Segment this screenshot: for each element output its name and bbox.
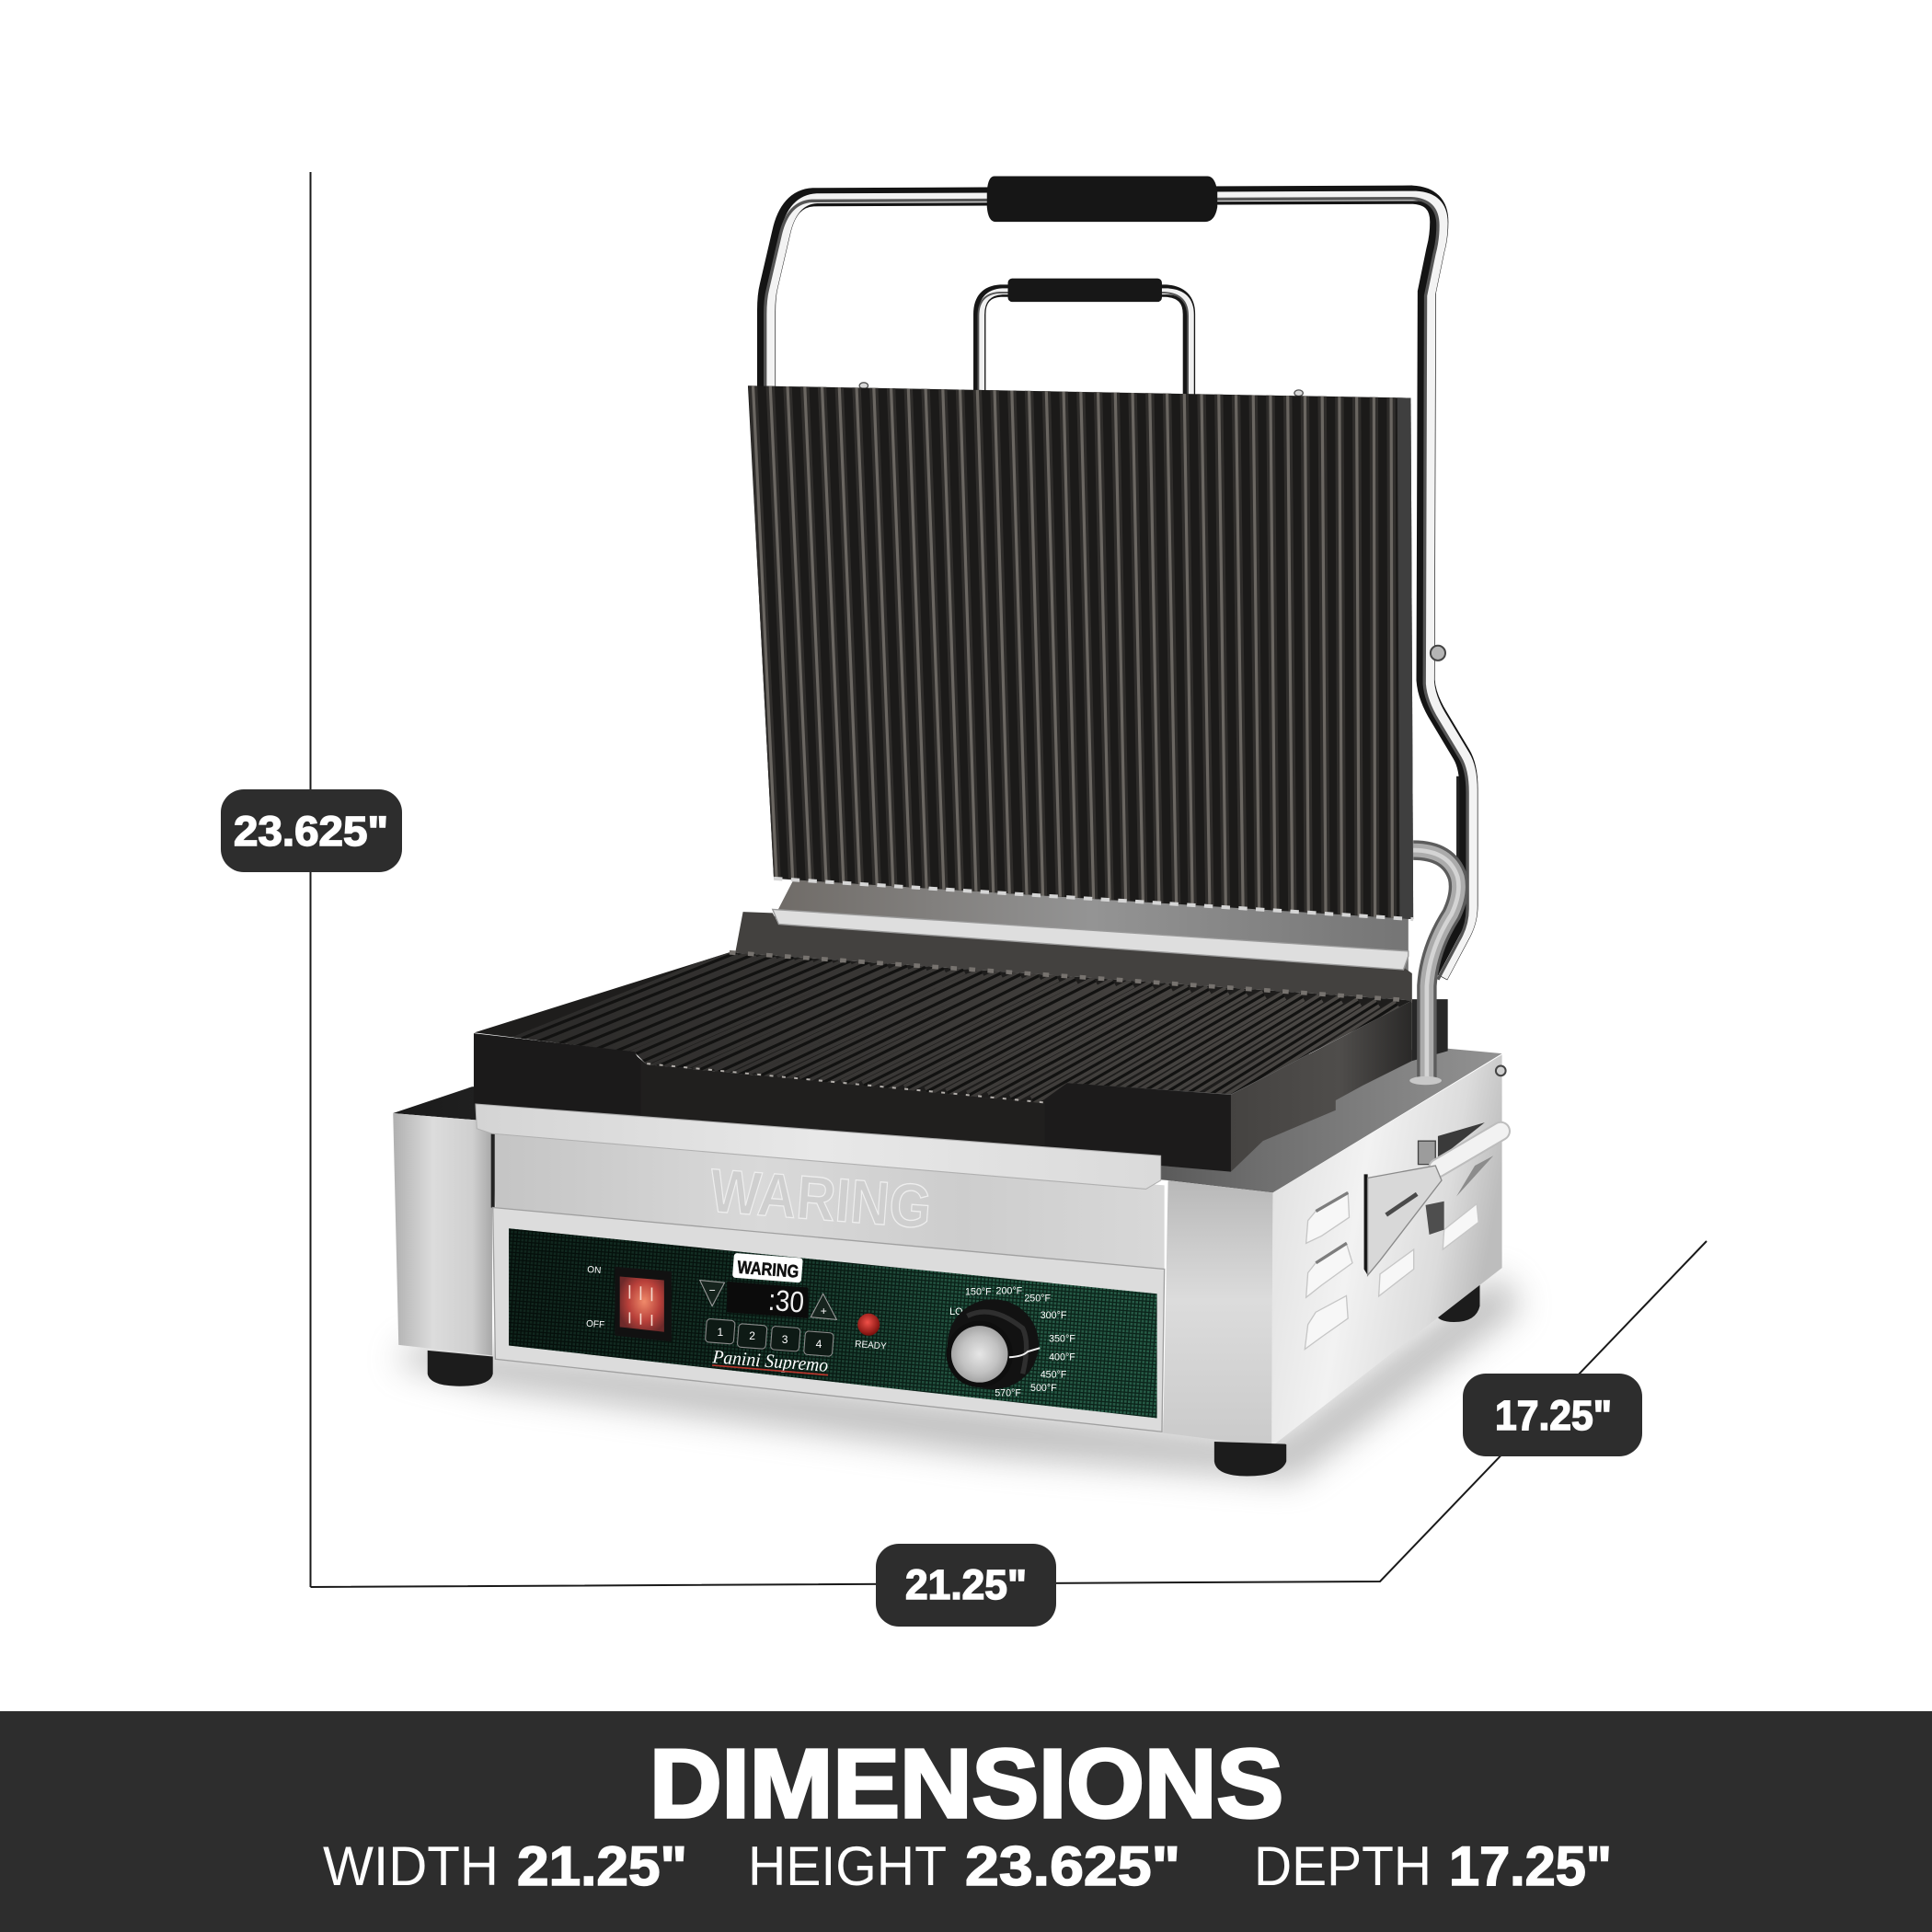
front stainless panel <box>491 1133 1165 1269</box>
preset button 1 <box>705 1318 735 1344</box>
stainless grease guard on lower plate <box>773 909 1409 970</box>
plus button <box>811 1294 836 1319</box>
floor shadow <box>395 1275 1522 1478</box>
product: panini grill <box>393 177 1522 1478</box>
preset button 4 <box>804 1331 834 1356</box>
height spec: 23.625" <box>965 1835 1180 1897</box>
temperature scale labels: 450°F <box>1041 1369 1067 1380</box>
rear right foot <box>1435 1269 1479 1322</box>
width spec: WIDTH <box>323 1835 499 1897</box>
preset button 3 <box>770 1326 800 1351</box>
plate front left block <box>474 1033 640 1115</box>
plate front centre lip <box>631 1051 1050 1152</box>
embossed WARING logo: WARING <box>707 1156 934 1242</box>
OFF label: OFF <box>586 1319 604 1330</box>
large handle grip <box>987 177 1217 222</box>
temperature scale labels: 500°F <box>1030 1383 1057 1394</box>
panel WARING logo badge: WARING <box>737 1258 799 1282</box>
base deck <box>393 1049 1502 1192</box>
temperature knob <box>947 1299 1040 1389</box>
control panel bezel <box>493 1208 1165 1432</box>
minus button <box>700 1281 725 1306</box>
Panini Supremo wordmark: Panini Supremo <box>711 1347 829 1376</box>
width spec <box>323 1835 687 1897</box>
lower ribbed grill surface <box>475 952 1412 1116</box>
louvre shadow edges <box>1316 1192 1348 1263</box>
temperature scale labels: 350°F <box>1049 1333 1075 1344</box>
upper ribbed grill plate <box>748 382 1413 924</box>
temperature scale labels: 250°F <box>1024 1293 1051 1304</box>
temperature scale labels <box>949 1285 1075 1398</box>
width label pill: 21.25" <box>905 1561 1027 1608</box>
green control panel <box>509 1228 1157 1419</box>
preset button 1: 1 <box>717 1326 723 1339</box>
steel hinge arm <box>1409 850 1458 1085</box>
left stainless column <box>393 1113 492 1355</box>
ON label: ON <box>587 1265 602 1276</box>
large chrome handle frame <box>765 195 1472 980</box>
preset button 2: 2 <box>749 1329 755 1342</box>
depth label pill: 17.25" <box>1495 1392 1612 1439</box>
width label pill <box>876 1544 1056 1627</box>
preset button 2 <box>737 1324 767 1349</box>
preset button 4: 4 <box>816 1338 822 1351</box>
right stainless column <box>1163 1180 1272 1446</box>
timer display <box>727 1282 809 1319</box>
width and depth dimension line <box>311 1241 1707 1587</box>
temperature scale labels: 300°F <box>1041 1310 1067 1321</box>
preset button 3: 3 <box>782 1333 788 1346</box>
height label pill <box>221 789 402 872</box>
upper plate top pins <box>859 383 1303 397</box>
temperature scale labels: 570°F <box>995 1387 1021 1398</box>
height spec <box>748 1835 1180 1897</box>
rocker power switch <box>615 1267 672 1341</box>
height label pill: 23.625" <box>234 808 388 855</box>
temperature scale labels: 400°F <box>1049 1352 1075 1363</box>
temperature scale labels: 150°F <box>965 1287 992 1298</box>
depth spec <box>1254 1835 1612 1897</box>
footer band <box>0 1711 1932 1932</box>
stainless splash bar <box>476 1104 1161 1189</box>
small chrome handle frame <box>978 291 1190 398</box>
height dimension line <box>309 172 311 1587</box>
plate front right block <box>1045 1083 1231 1172</box>
depth spec: DEPTH <box>1254 1835 1432 1897</box>
column gap shadow <box>491 1133 494 1208</box>
lower plate side face <box>1231 1001 1412 1172</box>
rear plate block <box>1412 999 1448 1061</box>
side corner screw <box>1496 1065 1506 1075</box>
title: DIMENSIONS <box>650 1730 1283 1838</box>
pivot screw <box>1431 646 1445 661</box>
small handle grip <box>1008 279 1162 302</box>
minus button: − <box>709 1283 716 1296</box>
height spec: HEIGHT <box>748 1835 947 1897</box>
plus button: + <box>821 1305 827 1317</box>
depth spec: 17.25" <box>1449 1835 1612 1897</box>
trough behind the lower plate <box>774 878 1409 973</box>
base right side panel <box>1271 1054 1502 1446</box>
temperature scale labels: LO <box>949 1306 962 1317</box>
depth label pill <box>1463 1374 1642 1456</box>
temperature scale labels: 200°F <box>996 1285 1023 1296</box>
side panel louvres <box>1305 1192 1478 1350</box>
lower plate back wall <box>730 912 1412 1001</box>
READY label: READY <box>855 1340 887 1352</box>
width spec: 21.25" <box>517 1835 687 1897</box>
timer display: :30 <box>767 1283 805 1319</box>
left front foot <box>428 1351 493 1386</box>
side latch <box>1364 1122 1501 1275</box>
right front foot <box>1214 1442 1286 1476</box>
ready LED <box>857 1314 880 1336</box>
inner tube of support arm <box>1457 776 1463 937</box>
